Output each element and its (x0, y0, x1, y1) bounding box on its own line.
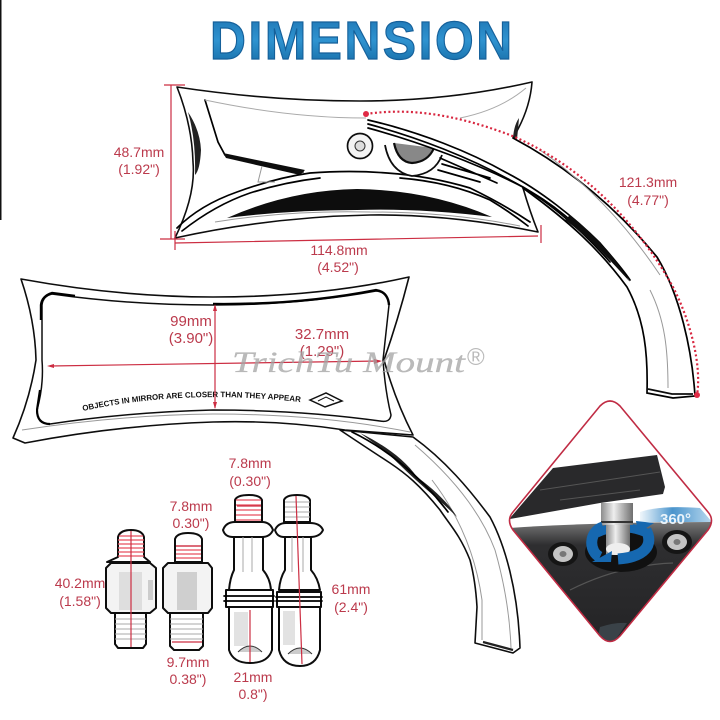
bolt label: 9.7mm (167, 654, 209, 670)
bolt label: 61mm (332, 581, 370, 597)
diamond logo (310, 393, 342, 407)
label: arm length inches: (4.77") (627, 192, 669, 208)
left screw (548, 542, 578, 566)
label: glass height: 99mm (170, 313, 212, 330)
black arm (510, 455, 665, 519)
bolt label: (2.4") (334, 599, 368, 615)
label: width inches: (4.52") (317, 259, 359, 275)
height dimension (160, 85, 185, 239)
glass lower-left corner (37, 390, 50, 424)
label: glass width inches: (1.29") (300, 343, 344, 360)
pivot mount (385, 143, 497, 183)
360 label: 360° (660, 511, 691, 528)
black crescent (227, 189, 492, 218)
chrome post (601, 503, 633, 525)
vertical arrows (213, 304, 217, 409)
crescent rib lines (177, 172, 530, 228)
watermark (232, 344, 485, 379)
bolt (348, 134, 372, 158)
housing inner window (205, 100, 303, 172)
title: DIMENSION (210, 10, 515, 70)
watermark: ® (467, 344, 485, 371)
label: arm length: 121.3mm (619, 174, 677, 190)
front mirror (12, 276, 414, 444)
360 badge (640, 507, 712, 522)
bolt 3 (223, 495, 274, 663)
mirror arm top (368, 120, 695, 398)
bolt label: 0.8") (238, 686, 268, 702)
bolt label: (1.58") (59, 593, 101, 609)
base plate (512, 522, 710, 638)
blue ring back (597, 528, 647, 533)
left shadow (188, 112, 201, 175)
legend text: OBJECTS IN MIRROR ARE CLOSER THAN THEY APPEAR (82, 392, 301, 410)
glass dark corners (41, 290, 389, 320)
label: height inches: (1.92") (118, 161, 160, 177)
bolt label: 0.30") (173, 515, 209, 531)
front mirror outline (13, 277, 413, 443)
width dimension (175, 225, 541, 250)
label: glass width: 32.7mm (295, 326, 349, 343)
bolt label: 21mm (234, 669, 272, 685)
diamond border (510, 401, 712, 642)
ring arrowheads (592, 521, 654, 562)
label: width: 114.8mm (310, 242, 368, 258)
bolt 1 (106, 530, 156, 648)
arm length dotted arc (363, 111, 700, 398)
blue rotate ring (592, 527, 649, 559)
bolt 2 (163, 533, 212, 650)
mirror housing outline (175, 82, 538, 238)
right screw (662, 530, 692, 554)
label: glass height inches: (3.90") (169, 330, 213, 347)
bolt label: 40.2mm (55, 575, 105, 591)
bolt label: 7.8mm (170, 498, 212, 514)
bolt labels top: 7.8mm (229, 455, 271, 471)
bolt label: 0.38") (170, 671, 206, 687)
left edge line (0, 0, 2, 220)
vertical dimension (214, 306, 216, 408)
watermark: TrichTu Mount (232, 346, 466, 379)
panel: 360 rotation detail (508, 400, 712, 642)
small bracket (258, 166, 275, 182)
bolt label: (0.30") (229, 473, 271, 489)
horizontal dimension (50, 361, 380, 366)
label: height: 48.7mm (114, 144, 164, 160)
bolt 4 (275, 495, 323, 666)
ring shadow (585, 532, 657, 572)
top mirror rear view (160, 82, 700, 398)
horizontal arrows (47, 359, 382, 368)
mirror glass (37, 291, 391, 424)
lower mirror arm (340, 430, 520, 653)
